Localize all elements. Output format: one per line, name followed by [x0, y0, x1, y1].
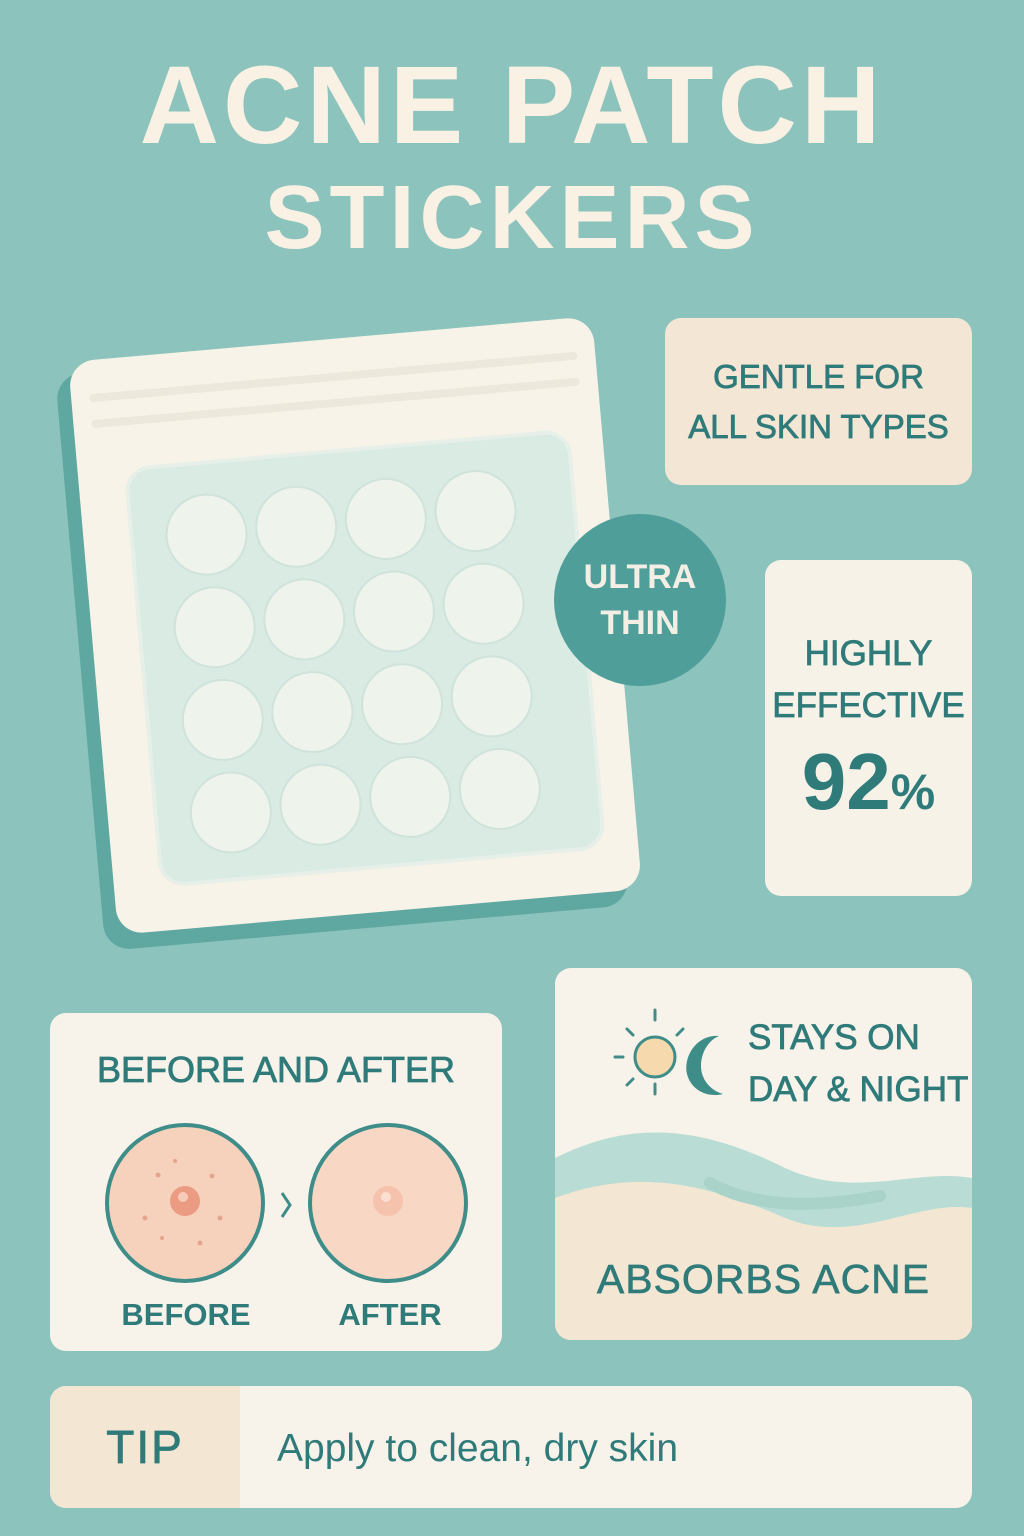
label: before: BEFORE [121, 1297, 251, 1332]
panel: gentle for all skin types: GENTLE FOR [713, 358, 924, 394]
badge: ultra thin: ULTRA [584, 558, 696, 596]
badge: ultra thin: THIN [600, 604, 680, 642]
illustration: patch pouch [57, 318, 640, 949]
heading: before and after: BEFORE AND AFTER [97, 1049, 455, 1090]
panel: highly effective: EFFECTIVE [772, 686, 965, 725]
panel: highly effective [765, 560, 972, 896]
stat: 92%: 92% [802, 737, 935, 826]
text: stays on day & night: DAY & NIGHT [748, 1070, 968, 1109]
badge: ultra thin [554, 514, 726, 686]
panel: stays on / absorbs acne [555, 968, 972, 1340]
label: after: AFTER [338, 1297, 442, 1332]
text: stays on day & night [748, 1018, 968, 1109]
icon: sun and moon [614, 1008, 723, 1096]
label: tip [50, 1386, 240, 1508]
panel: before and after [50, 1013, 502, 1351]
text: stays on day & night: STAYS ON [748, 1018, 920, 1057]
text: tip content: Apply to clean, dry skin [277, 1427, 678, 1470]
wave illustration [555, 1132, 972, 1340]
title: STICKERS [264, 168, 760, 268]
label: tip: TIP [106, 1421, 184, 1473]
chart: skin before/after circles [105, 1123, 468, 1283]
panel: gentle for all skin types [665, 318, 972, 485]
panel: tip [50, 1386, 972, 1508]
panel: highly effective: HIGHLY [805, 634, 932, 673]
panel: gentle for all skin types: ALL SKIN TYPES [688, 408, 949, 444]
title [140, 44, 884, 268]
title: ACNE PATCH [140, 44, 884, 167]
text: absorbs acne: ABSORBS ACNE [597, 1256, 930, 1302]
